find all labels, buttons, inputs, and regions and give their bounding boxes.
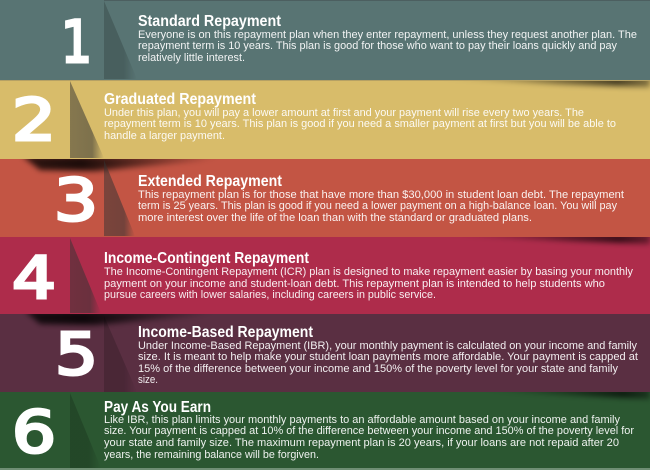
body text: income-based repayment: size. [138,374,158,386]
body text: standard repayment: repayment term is 10 years. This plan is good for those who want to pay their loans quickly and pay [138,40,617,52]
body text: pay as you earn: size. Your payment is capped at 10% of the difference between your income and 150% of the poverty level for [104,425,634,437]
number 4: 4 [12,244,56,312]
body text: extended repayment: This repayment plan is for those that have more than $30,000 in student loan debt. The repayment [138,189,624,201]
heading: graduated repayment: Graduated Repayment [104,91,257,108]
body text: pay as you earn: years, the remaining balance will be forgiven. [104,449,319,461]
body text: pay as you earn: Like IBR, this plan limits your monthly payments to an affordable amount based on your income and family [104,414,620,426]
heading: pay as you earn: Pay As You Earn [104,399,211,416]
cast shadow under band 3 [486,237,650,248]
number 6: 6 [12,398,56,466]
body text: standard repayment: Everyone is on this repayment plan when they enter repayment, unless they request another plan. The [138,29,637,41]
body text: extended repayment [138,189,624,224]
body text: income-based repayment: 15% of the difference between your income and 150% of the poverty level for your state and family [138,363,618,375]
cast shadow under band 4 [26,314,194,328]
number 2: 2 [12,86,56,154]
number 1: 1 [61,8,92,76]
fold shadow 4 [70,238,101,313]
body text: income-based repayment: size. It is meant to help make your student loan payments more affordable. Your payment is capped at [138,351,638,363]
number 3: 3 [54,166,98,234]
number 5: 5 [55,320,98,388]
body text: income-contingent repayment: The Income-Contingent Repayment (ICR) plan is designed to make repayment easier by basing your monthly [104,266,633,278]
fold shadow 1 [104,1,137,79]
body text: standard repayment [138,29,637,64]
heading: income-contingent repayment: Income-Contingent Repayment [104,250,310,267]
body text: graduated repayment [104,107,616,142]
band 1: standard repayment [0,0,650,80]
fold shadow 5 [104,316,137,392]
body text: extended repayment: term is 25 years. This plan is good if you need a lower payment on a high-balance loan. You will pay [138,200,617,212]
body text: extended repayment: more interest over the life of the loan than with the standard or graduated plans. [138,212,532,224]
body text: income-contingent repayment: payment on your income and student-loan debt. This repayment plan is intended to help students who [104,278,605,290]
heading: extended repayment: Extended Repayment [138,173,283,190]
fold shadow 6 [70,393,101,468]
body text: income-contingent repayment: pursue careers with lower salaries, including careers in public service. [104,289,436,301]
body text: income-based repayment: Under Income-Based Repayment (IBR), your monthly payment is calculated on your income and family [138,340,637,352]
body text: standard repayment: relatively little interest. [138,52,245,64]
body text: income-based repayment [138,340,638,386]
cast shadow under band 1 [478,81,650,90]
body text: pay as you earn [104,414,634,461]
body text: income-contingent repayment [104,266,633,301]
body text: pay as you earn: your state and family size. The maximum repayment plan is 20 years, if your loans are not repaid after 20 [104,437,619,449]
body text: graduated repayment: Under this plan, you will pay a lower amount at first and your payment will rise every two years. The [104,107,584,119]
band 5: income-based repayment [0,311,650,393]
heading: standard repayment: Standard Repayment [138,13,282,30]
body text: graduated repayment: handle a larger payment. [104,130,225,142]
band 4: income-contingent repayment [0,234,650,314]
cast shadow under band 5 [526,392,650,401]
band 2: graduated repayment [0,77,650,159]
cast shadow under band 2 [22,156,222,171]
fold shadow 2 [70,81,104,158]
fold shadow 3 [104,160,135,236]
body text: graduated repayment: repayment term is 10 years. This plan is good if you need a smaller payment at first but you will be able to [104,118,616,130]
band 6: pay as you earn [0,389,650,468]
heading: income-based repayment: Income-Based Repayment [138,324,314,341]
band 3: extended repayment [0,156,650,237]
